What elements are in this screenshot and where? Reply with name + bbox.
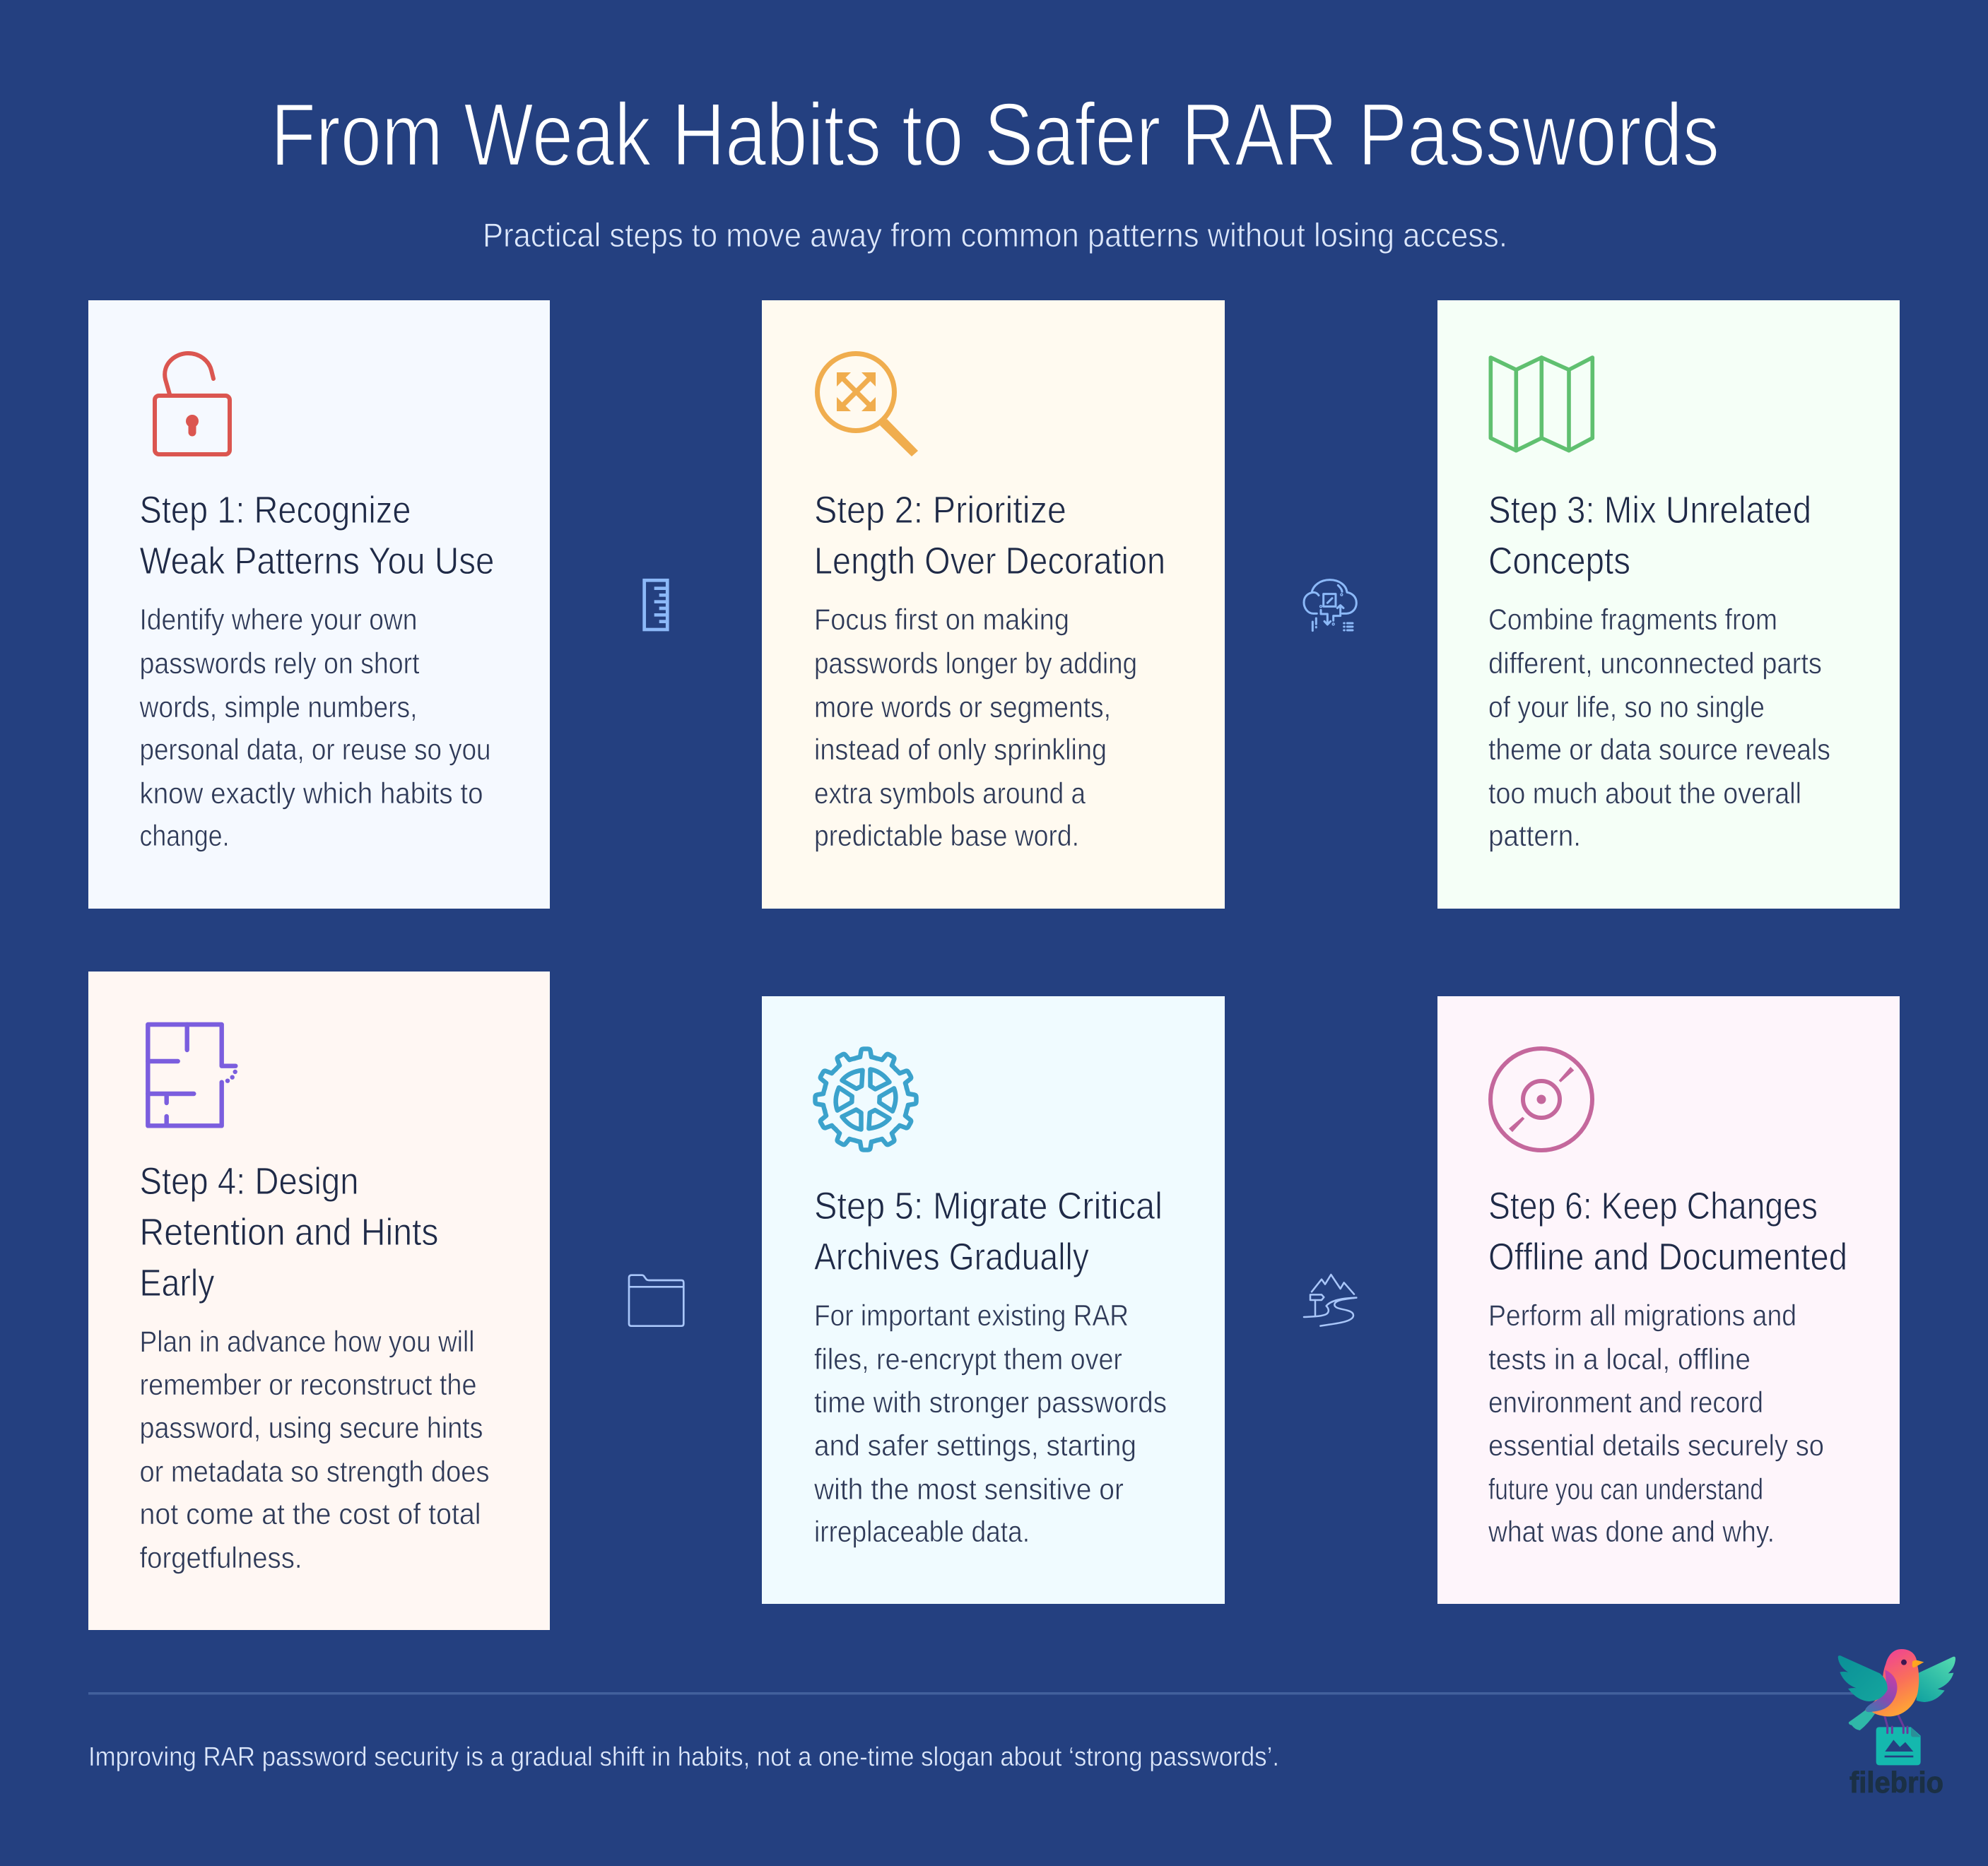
body text: passwords rely on short — [140, 646, 420, 680]
panel: step 2 — [762, 300, 1225, 909]
body text: and safer settings, starting — [814, 1429, 1136, 1462]
icon: disc — [1490, 1049, 1592, 1150]
icon: ruler — [645, 580, 667, 630]
heading: Step 4: Design — [140, 1160, 359, 1203]
footer note: Improving RAR password security is a gradual shift in habits, not a one-time slogan about ‘strong passwords’. — [88, 1742, 1279, 1772]
heading: Step 3: Mix Unrelated — [1488, 489, 1811, 531]
logo: filebrio — [1838, 1649, 1955, 1799]
panel: step 1 — [88, 300, 550, 909]
body text: not come at the cost of total — [140, 1497, 481, 1530]
icon: mountain road signpost — [1304, 1275, 1356, 1326]
panel: step 3 — [1437, 300, 1900, 909]
heading — [140, 489, 495, 582]
body text: personal data, or reuse so you — [140, 733, 490, 766]
body text: Combine fragments from — [1488, 603, 1777, 636]
body text: files, re-encrypt them over — [814, 1342, 1122, 1376]
body text: more words or segments, — [814, 690, 1111, 724]
body text — [814, 603, 1137, 852]
heading — [140, 1160, 438, 1304]
heading: Concepts — [1488, 540, 1630, 582]
icon: magnifier with arrows — [817, 353, 918, 456]
body text: theme or data source reveals — [1488, 733, 1830, 766]
title: From Weak Habits to Safer RAR Passwords — [271, 85, 1719, 184]
heading: Early — [140, 1262, 215, 1304]
heading: Step 1: Recognize — [140, 489, 411, 531]
heading — [814, 1185, 1163, 1278]
heading — [814, 489, 1165, 582]
body text: of your life, so no single — [1488, 690, 1765, 724]
icon: gear wheel — [816, 1049, 916, 1150]
heading: Step 5: Migrate Critical — [814, 1185, 1163, 1227]
body text: know exactly which habits to — [140, 776, 483, 810]
body text: For important existing RAR — [814, 1299, 1129, 1332]
heading: Step 2: Prioritize — [814, 489, 1066, 531]
body text: future you can understand — [1488, 1472, 1763, 1506]
body text: Perform all migrations and — [1488, 1299, 1796, 1332]
body text: pattern. — [1488, 819, 1581, 852]
body text: too much about the overall — [1488, 776, 1801, 810]
body text: extra symbols around a — [814, 776, 1086, 810]
body text: predictable base word. — [814, 819, 1079, 852]
body text: irreplaceable data. — [814, 1515, 1030, 1548]
body text: Identify where your own — [140, 603, 417, 636]
body text: password, using secure hints — [140, 1411, 483, 1444]
icon: cloud with arrows — [1304, 580, 1356, 631]
heading — [1488, 489, 1811, 582]
heading: Offline and Documented — [1488, 1236, 1847, 1278]
icon: folder — [629, 1275, 683, 1326]
body text: passwords longer by adding — [814, 646, 1137, 680]
heading: Length Over Decoration — [814, 540, 1165, 582]
heading: Weak Patterns You Use — [140, 540, 495, 582]
body text: change. — [140, 819, 229, 852]
subtitle: Practical steps to move away from common patterns without losing access. — [483, 216, 1507, 254]
body text — [1488, 603, 1830, 852]
body text: Focus first on making — [814, 603, 1069, 636]
body text: environment and record — [1488, 1386, 1763, 1419]
panel: step 4 — [88, 972, 550, 1630]
body text: Plan in advance how you will — [140, 1325, 475, 1358]
body text — [1488, 1299, 1824, 1548]
body text: different, unconnected parts — [1488, 646, 1822, 680]
body text — [813, 1299, 1167, 1548]
body text: time with stronger passwords — [814, 1386, 1167, 1419]
icon: folded map — [1490, 358, 1592, 451]
body text: tests in a local, offline — [1488, 1342, 1751, 1376]
body text: essential details securely so — [1488, 1429, 1824, 1462]
body text: remember or reconstruct the — [140, 1368, 476, 1401]
body text: forgetfulness. — [140, 1541, 302, 1574]
body text: instead of only sprinkling — [814, 733, 1107, 766]
panel: step 6 — [1437, 996, 1900, 1604]
panel: step 5 — [762, 996, 1225, 1604]
body text: words, simple numbers, — [139, 690, 417, 724]
body text — [140, 1325, 489, 1574]
heading — [1488, 1185, 1847, 1278]
body text: with the most sensitive or — [813, 1472, 1124, 1506]
heading: Archives Gradually — [814, 1236, 1089, 1278]
body text — [139, 603, 490, 852]
body text: or metadata so strength does — [140, 1455, 489, 1488]
logo: filebrio: filebrio — [1849, 1766, 1943, 1799]
body text: what was done and why. — [1488, 1515, 1775, 1548]
icon: open padlock — [155, 353, 230, 454]
heading: Retention and Hints — [140, 1211, 438, 1253]
icon: floor plan — [148, 1024, 237, 1126]
heading: Step 6: Keep Changes — [1488, 1185, 1818, 1227]
